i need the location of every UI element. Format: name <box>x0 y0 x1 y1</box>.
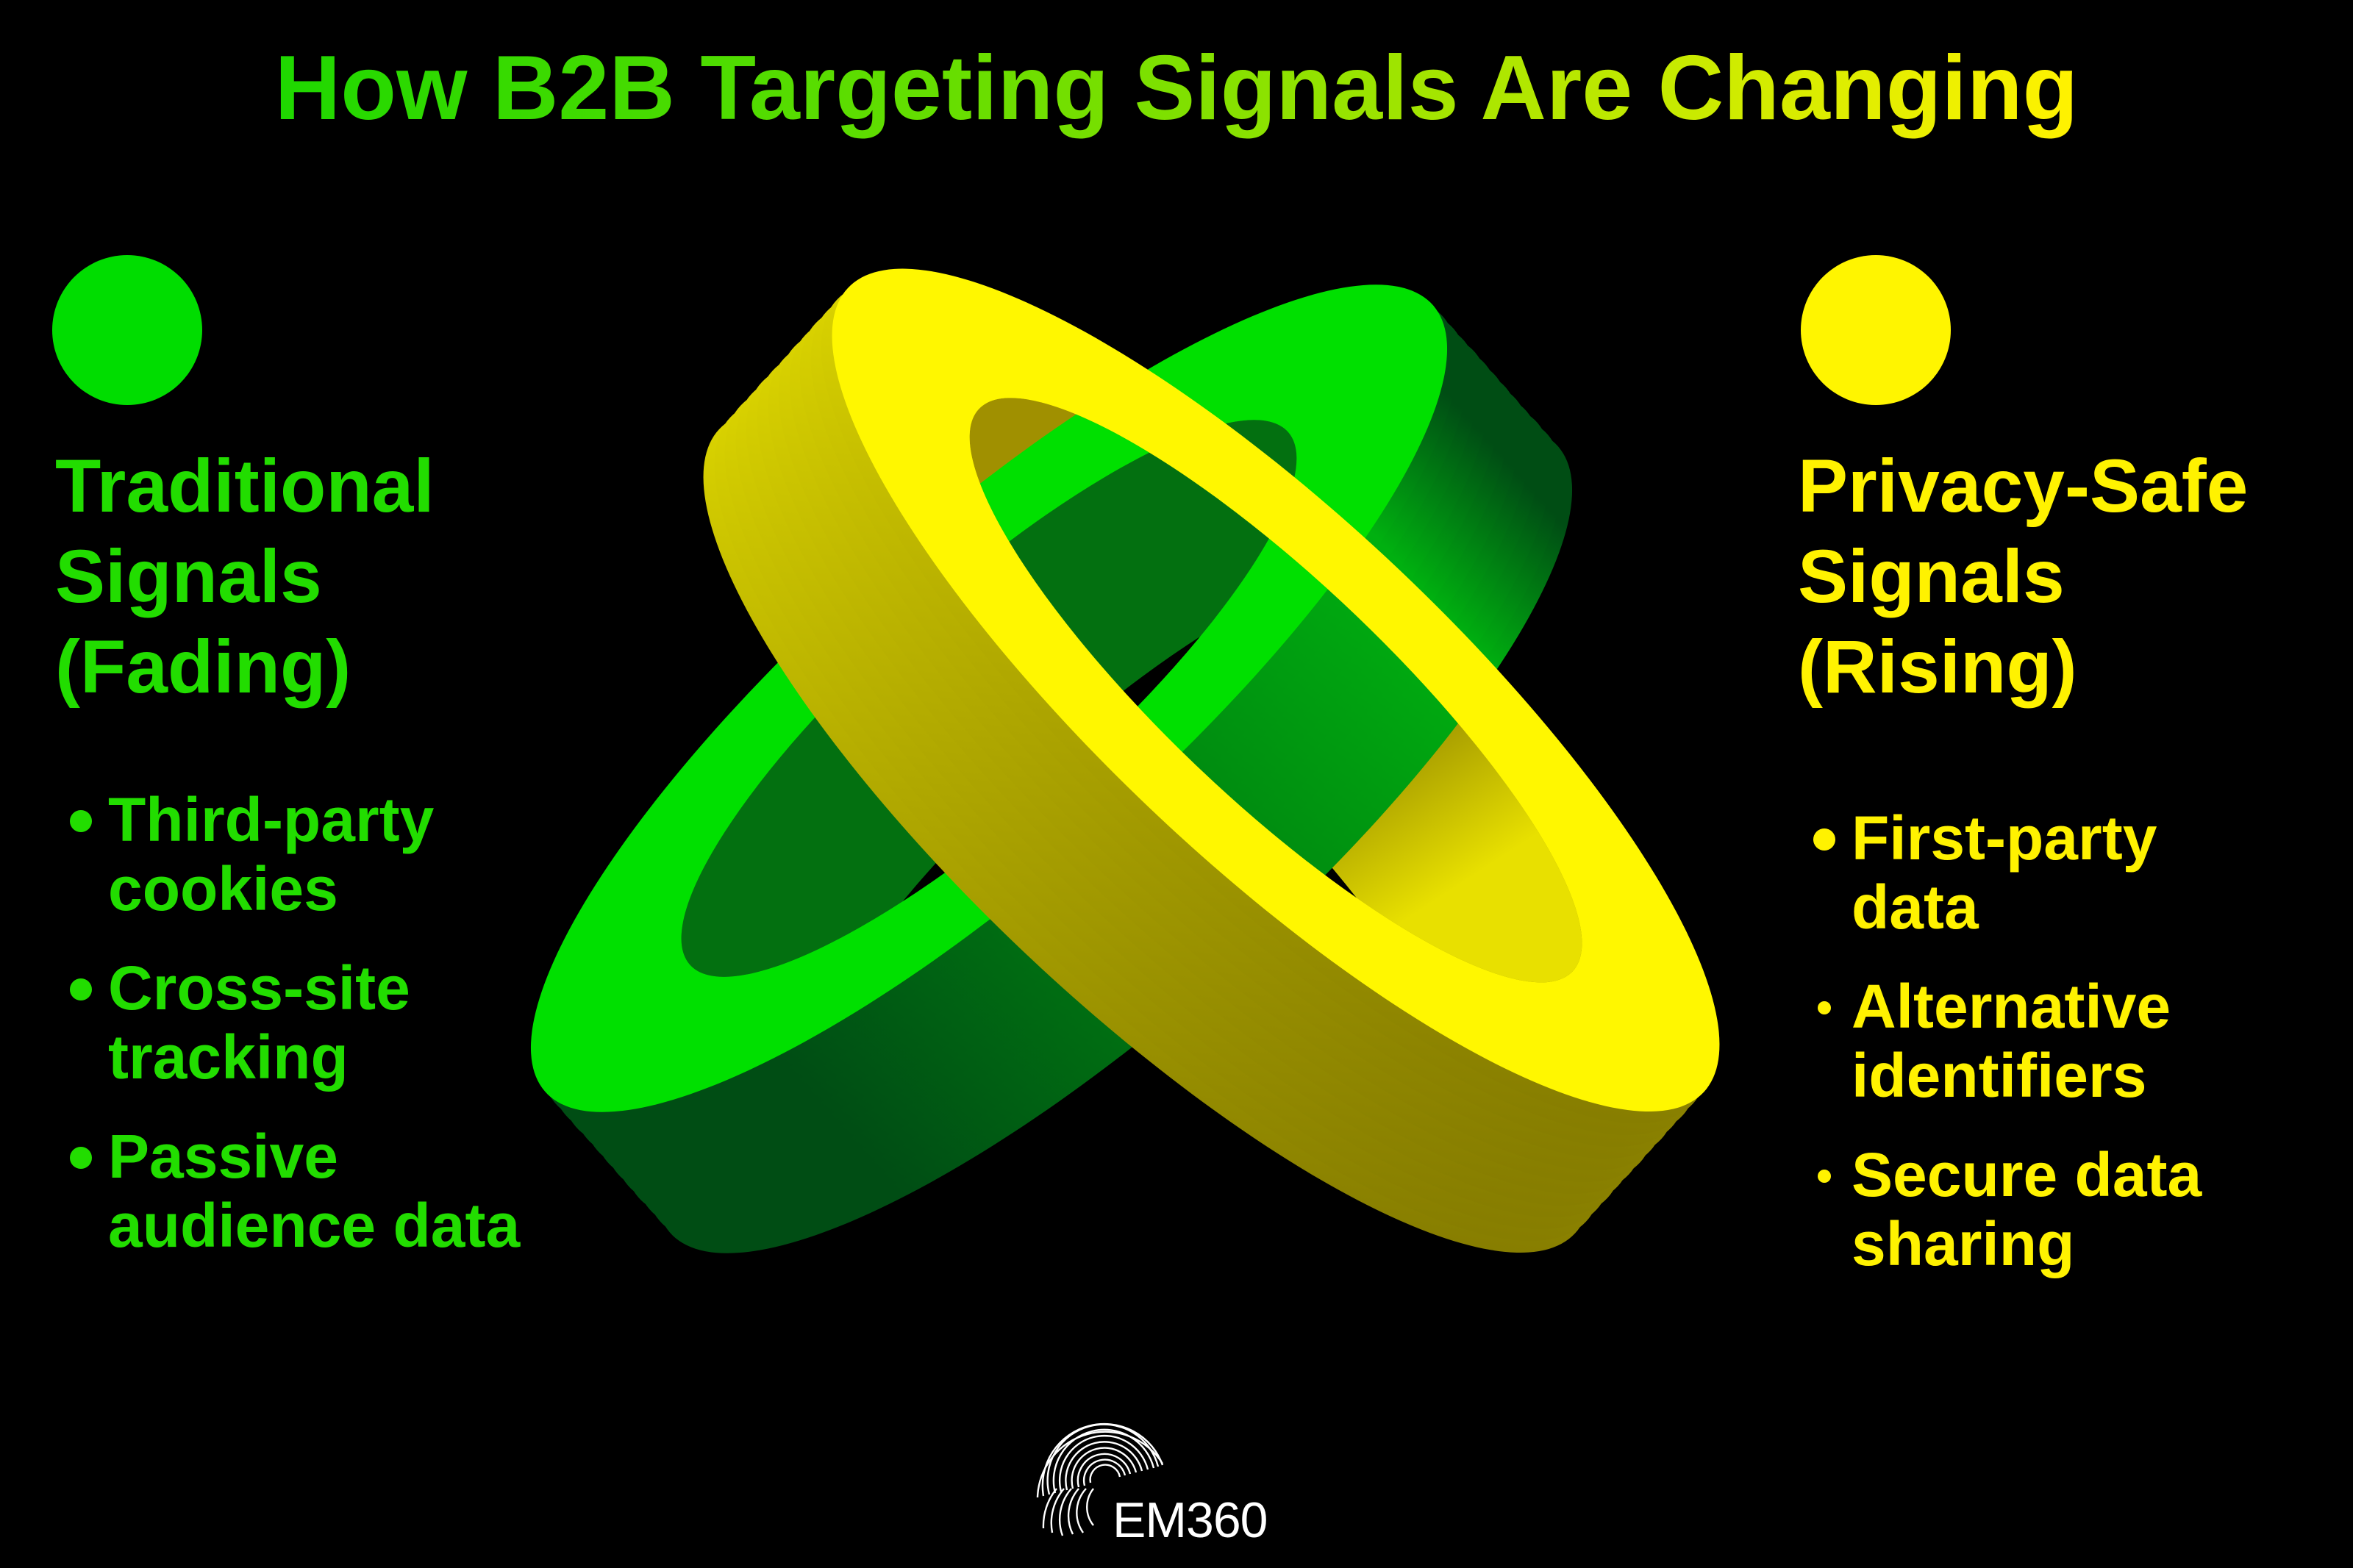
list: privacy-safe <box>1813 803 2202 1278</box>
bullet: first-party data: First-party <box>1852 803 2157 873</box>
bullet: passive audience data: audience data <box>108 1191 520 1260</box>
list: traditional <box>70 785 521 1260</box>
ring: green <box>531 284 1572 1253</box>
heading: privacy-safe signals: Privacy-Safe <box>1798 444 2248 528</box>
bullet: third-party cookies: Third-party <box>108 785 434 854</box>
heading: privacy-safe signals: (Rising) <box>1798 625 2077 709</box>
bullet: first-party data <box>1813 803 2157 942</box>
bullet: first-party data: data <box>1852 873 1979 942</box>
bullet: passive audience data: Passive <box>108 1122 338 1191</box>
bullet: passive audience data <box>70 1122 521 1260</box>
heading: privacy-safe signals: Signals <box>1798 534 2065 618</box>
bullet: alternative identifiers: identifiers <box>1852 1041 2146 1110</box>
logo text: EM360 <box>1113 1492 1267 1548</box>
bullet: alternative identifiers: Alternative <box>1852 972 2171 1041</box>
heading: traditional signals: Traditional <box>55 444 435 528</box>
ring: yellow <box>703 269 1719 1253</box>
bullet: secure data sharing: sharing <box>1852 1209 2074 1278</box>
chart: interlocking rings <box>531 269 1719 1253</box>
heading: traditional signals: (Fading) <box>55 625 351 709</box>
bullet: cross-site tracking: Cross-site <box>108 953 410 1023</box>
bullet: secure data sharing <box>1818 1140 2202 1278</box>
title: How B2B Targeting Signals Are Changing <box>275 37 2078 139</box>
heading: traditional signals: Signals <box>55 534 322 618</box>
icon: swirl <box>1037 1423 1163 1536</box>
heading: privacy-safe signals <box>1798 444 2248 709</box>
bullet: secure data sharing: Secure data <box>1852 1140 2202 1209</box>
bullet: third-party cookies <box>70 785 434 923</box>
heading: traditional signals <box>55 444 435 709</box>
icon: yellow circle <box>1801 255 1951 405</box>
bullet: cross-site tracking <box>70 953 410 1092</box>
bullet: alternative identifiers <box>1818 972 2171 1110</box>
icon: green circle <box>52 255 202 405</box>
bullet: cross-site tracking: tracking <box>108 1023 349 1092</box>
bullet: third-party cookies: cookies <box>108 854 338 923</box>
logo: EM360 <box>1037 1423 1267 1548</box>
